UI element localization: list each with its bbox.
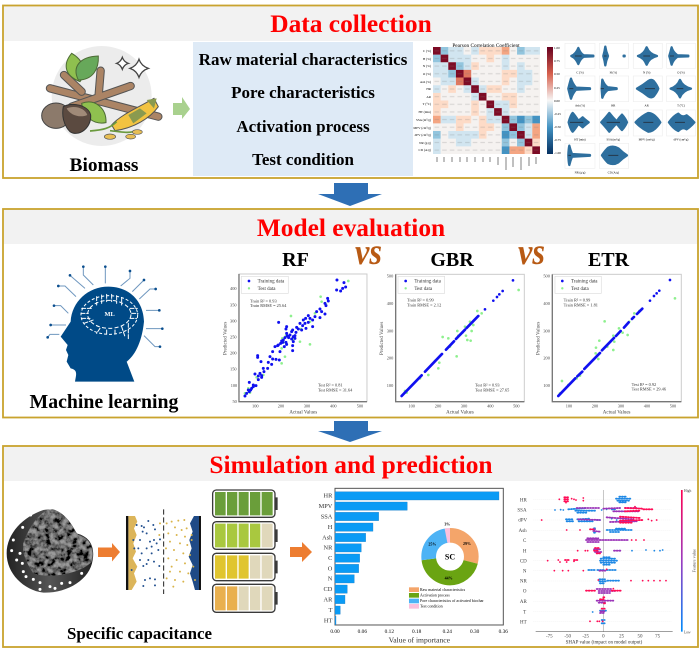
chart: pearson correlation heatmap: 0.75 [554, 59, 560, 63]
heading: RF: RF [282, 249, 309, 271]
chart: feature importance bars: T [328, 607, 332, 614]
chart: pearson correlation heatmap: HR [426, 87, 432, 91]
chart: pearson correlation heatmap: Pearson Correlation Coefficient [452, 42, 520, 49]
chart: SHAP beeswarm: SSA [517, 508, 527, 513]
title: data collection: Data collection [270, 10, 432, 38]
chart: GBR scatter: 400 [387, 301, 393, 306]
chart: GBR scatter: 100 [387, 383, 393, 388]
chart: feature violin plots [565, 43, 696, 174]
chart: GBR scatter: Test RMSE = 27.65 [475, 387, 509, 392]
chart: feature importance bars: HR [324, 493, 333, 500]
chart: ETR scatter: Train R² = 0.99 [564, 298, 590, 303]
chart: feature importance bars: 0.18 [412, 629, 422, 635]
chart: ETR scatter [537, 274, 681, 416]
chart: SHAP beeswarm: Ash [519, 529, 527, 534]
legend: donut categories: Raw material characteristics [420, 587, 466, 592]
chart: ETR scatter: 300 [543, 328, 550, 333]
chart: feature importance bars: H [328, 524, 333, 531]
chart: SHAP beeswarm: H [523, 549, 527, 554]
chart: RF scatter: 150 [230, 367, 237, 372]
chart: feature violin plots: HT (min) [574, 138, 586, 142]
chart: feature importance bars: NR [324, 545, 333, 552]
chart: pearson correlation heatmap [413, 42, 561, 170]
chart: SHAP beeswarm: 0 [602, 634, 605, 639]
chart: SHAP beeswarm: T [523, 610, 526, 615]
chart: SHAP beeswarm: NR [520, 580, 527, 585]
chart: pearson correlation heatmap: -0.50 [554, 125, 561, 129]
chart: ETR scatter: Test RMSE = 29.46 [632, 387, 667, 392]
chart: ETR scatter: 200 [592, 404, 598, 409]
chart: SC category donut: SC [445, 552, 455, 561]
chart: GBR scatter: 200 [387, 356, 393, 361]
chart: ETR scatter: 100 [566, 404, 572, 409]
chart: GBR scatter: Actual Values [446, 411, 474, 416]
chart: feature violin plots: HR [611, 104, 615, 108]
chart: ETR scatter: 100 [543, 383, 550, 388]
chart: pearson correlation heatmap: O (%) [423, 72, 431, 76]
chart: GBR scatter: 100 [408, 404, 415, 409]
chart: feature importance bars: CD [324, 586, 333, 593]
panel: feature categories: Activation process [236, 117, 370, 136]
chart: feature violin plots: C (%) [576, 71, 584, 75]
icon: biomass [42, 46, 158, 146]
chart: ETR scatter: 300 [618, 404, 624, 409]
chart: feature violin plots: H (%) [610, 71, 617, 75]
chart: feature importance bars: HT [324, 617, 332, 624]
icon: machine learning head: ML [105, 311, 115, 318]
chart: SHAP beeswarm: dPV [518, 519, 527, 524]
chart: feature importance bars: SSA [321, 513, 333, 520]
chart: SC category donut [428, 522, 471, 581]
chart: RF scatter: 400 [330, 404, 337, 409]
chart: GBR scatter: Test R² = 0.93 [475, 383, 500, 388]
chart: RF scatter: Actual Values [289, 411, 317, 416]
chart: feature importance bars: 0.12 [385, 629, 394, 635]
chart: RF scatter: Training data [258, 279, 285, 284]
chart: RF scatter: 500 [357, 404, 363, 409]
chart: feature violin plots: Ash (%) [575, 104, 585, 108]
chart: SHAP beeswarm: HR [520, 498, 527, 503]
heading: GBR: GBR [430, 249, 474, 271]
chart: pearson correlation heatmap: CD (A/g) [418, 148, 431, 152]
arrow: data collection to model evaluation [318, 183, 382, 206]
icon: machine learning head [48, 267, 162, 382]
panel: feature categories [193, 42, 413, 176]
chart: RF scatter: 50 [232, 399, 237, 404]
chart: RF scatter: Predicted Values [223, 322, 228, 355]
chart: RF scatter: 400 [230, 286, 237, 291]
legend: donut categories: Pore characteristics of activated biochar [420, 598, 484, 603]
chart: GBR scatter: 200 [435, 404, 441, 409]
chart: feature importance bars: O [328, 565, 333, 572]
chart: pearson correlation heatmap: -0.25 [554, 112, 561, 116]
chart: feature importance bars: AR [324, 596, 333, 603]
chart: RF scatter: Test RMSE = 31.64 [318, 387, 353, 392]
chart: ETR scatter: Test R² = 0.92 [632, 382, 656, 387]
chart: GBR scatter [380, 274, 524, 416]
chart: pearson correlation heatmap: SSA (m²/g) [416, 118, 431, 122]
vs label: vs [518, 232, 545, 273]
chart: feature importance bars: 0.00 [330, 629, 340, 635]
chart: RF scatter: 200 [230, 351, 237, 356]
chart: RF scatter: 250 [230, 334, 237, 339]
chart: pearson correlation heatmap: H (%) [423, 57, 431, 61]
chart: feature violin plots: SSA (m²/g) [607, 138, 620, 142]
image: porous carbon SEM [7, 509, 93, 593]
title: simulation and prediction: Simulation and prediction [209, 451, 493, 479]
chart: SHAP beeswarm: 25 [619, 634, 625, 639]
chart: SC category donut: 29% [463, 541, 471, 546]
arrow: battery to feature importance [290, 542, 312, 562]
legend: donut categories: Activation process [420, 592, 450, 597]
title: model evaluation: Model evaluation [257, 214, 445, 242]
chart: GBR scatter: Test data [414, 287, 433, 292]
chart: SC category donut: 25% [428, 541, 436, 546]
heading: ETR: ETR [588, 249, 630, 271]
chart: feature violin plots: dPV (cm³/g) [674, 138, 688, 142]
chart: SC category donut: 3% [444, 522, 450, 527]
chart: feature importance bars [319, 488, 508, 644]
chart: GBR scatter: Train R² = 0.99 [407, 298, 434, 303]
chart: feature importance bars: 0.24 [443, 629, 452, 635]
chart: SHAP beeswarm: -25 [582, 634, 589, 639]
chart: SHAP beeswarm: -75 [546, 634, 553, 639]
panel: feature categories: Raw material characteristics [199, 50, 408, 69]
chart: feature importance bars: C [328, 555, 332, 562]
chart: GBR scatter: 400 [487, 404, 494, 409]
chart: SHAP beeswarm: CD [520, 559, 527, 564]
chart: pearson correlation heatmap: MPV (cm³/g) [413, 126, 431, 130]
chart: feature importance bars: N [328, 576, 333, 583]
arrow: SEM to electrode [98, 543, 120, 562]
chart: feature violin plots: AR [645, 104, 649, 108]
chart: RF scatter: 300 [230, 318, 237, 323]
panel: data collection [3, 6, 698, 178]
chart: RF scatter: 200 [278, 404, 284, 409]
chart: ETR scatter: Test data [571, 287, 590, 292]
chart: GBR scatter: Predicted Values [380, 322, 385, 355]
chart: RF scatter: Train RMSE = 25.64 [250, 303, 287, 308]
chart: SHAP beeswarm: O [523, 590, 527, 595]
chart: SC category donut: 44% [445, 576, 453, 581]
chart: RF scatter: Test data [258, 287, 276, 292]
chart: ETR scatter: Actual Values [603, 411, 631, 416]
icon: supercapacitor ion diagram [126, 509, 201, 594]
chart: RF scatter: 350 [230, 302, 237, 307]
chart: feature violin plots: NR (g/g) [575, 170, 585, 174]
chart: GBR scatter: 300 [387, 328, 393, 333]
legend: SHAP feature value colorbar: Feature value [691, 549, 696, 572]
chart: pearson correlation heatmap: 1.00 [554, 46, 560, 50]
chart: ETR scatter: Training data [571, 279, 598, 284]
chart: ETR scatter: 500 [670, 404, 676, 409]
chart: RF scatter: 100 [252, 404, 259, 409]
chart: feature violin plots: O (%) [677, 71, 685, 75]
chart: feature violin plots: T (°C) [677, 104, 685, 108]
chart: SHAP beeswarm: 75 [655, 634, 661, 639]
chart: SHAP beeswarm: -50 [564, 634, 571, 639]
chart: pearson correlation heatmap: 0.50 [554, 72, 560, 76]
chart: pearson correlation heatmap: HT (min) [419, 110, 431, 114]
chart: feature importance bars: 0.36 [499, 629, 508, 635]
chart: ETR scatter: 400 [644, 404, 650, 409]
chart: feature importance bars: 0.30 [470, 629, 480, 635]
legend: SHAP feature value colorbar: Low [684, 630, 691, 634]
chart: ETR scatter: Predicted Values [537, 322, 542, 355]
chart: pearson correlation heatmap: -1.00 [554, 151, 561, 155]
chart: RF scatter: Train R² = 0.93 [250, 298, 277, 303]
chart: pearson correlation heatmap: dPV (cm³/g) [415, 133, 431, 137]
chart: feature importance bars: Value of importance [389, 635, 451, 644]
chart: RF scatter [223, 274, 367, 416]
chart: feature violin plots: CD (A/g) [608, 170, 619, 174]
chart: pearson correlation heatmap: C (%) [423, 49, 431, 53]
chart: feature violin plots: N (%) [643, 71, 650, 75]
chart: SHAP beeswarm: C [523, 539, 527, 544]
vs label: vs [355, 232, 382, 273]
chart: RF scatter: 100 [231, 383, 237, 388]
chart: SHAP beeswarm: AR [520, 600, 527, 605]
chart: feature importance bars: MPV [319, 503, 333, 510]
legend: donut categories [409, 587, 484, 609]
panel: feature categories: Pore characteristics [231, 83, 375, 102]
chart: pearson correlation heatmap: Ash (%) [420, 80, 431, 84]
panel: model evaluation [3, 209, 698, 418]
legend: SHAP feature value colorbar: High [684, 489, 691, 493]
chart: pearson correlation heatmap: AR [426, 95, 432, 99]
chart: feature violin plots: MPV (cm³/g) [639, 138, 655, 142]
label: machine learning: Machine learning [30, 391, 179, 413]
chart: GBR scatter: 300 [461, 404, 467, 409]
panel: feature categories: Test condition [252, 150, 354, 169]
chart: pearson correlation heatmap: 0.25 [554, 86, 560, 90]
chart: feature importance bars: Ash [322, 534, 333, 541]
panel: simulation and prediction [3, 446, 698, 647]
chart: pearson correlation heatmap: T (°C) [422, 102, 431, 106]
chart: ETR scatter: 500 [543, 274, 550, 279]
legend: SHAP feature value colorbar [681, 489, 696, 634]
chart: SHAP beeswarm [517, 489, 696, 645]
chart: RF scatter: Test R² = 0.81 [318, 383, 343, 388]
chart: pearson correlation heatmap: 0.00 [554, 99, 560, 103]
chart: RF scatter: 300 [304, 404, 310, 409]
arrow: model evaluation to simulation [318, 421, 382, 442]
chart: ETR scatter: 200 [543, 356, 550, 361]
chart: SHAP beeswarm: SHAP value (impact on model output) [566, 640, 643, 645]
chart: SHAP beeswarm: HT [520, 620, 527, 625]
label: biomass: Biomass [70, 155, 139, 176]
chart: pearson correlation heatmap: N (%) [423, 64, 431, 68]
chart: SHAP beeswarm: 50 [637, 634, 643, 639]
chart: ETR scatter: Train RMSE = 1.81 [564, 302, 598, 307]
chart: SHAP beeswarm: N [523, 569, 527, 574]
chart: ETR scatter: 400 [543, 301, 550, 306]
chart: GBR scatter: Train RMSE = 2.12 [407, 302, 441, 307]
chart: pearson correlation heatmap: -0.75 [554, 138, 561, 142]
chart: pearson correlation heatmap: NR (g/g) [419, 141, 431, 145]
arrow: biomass to features [173, 97, 190, 119]
label: specific capacitance: Specific capacitance [67, 624, 212, 643]
chart: feature importance bars: 0.06 [358, 629, 367, 635]
chart: GBR scatter: 500 [387, 274, 393, 279]
legend: donut categories: Test condition [420, 603, 443, 608]
chart: GBR scatter: 500 [513, 404, 520, 409]
chart: GBR scatter: Training data [414, 279, 442, 284]
icon: battery levels [213, 490, 278, 612]
